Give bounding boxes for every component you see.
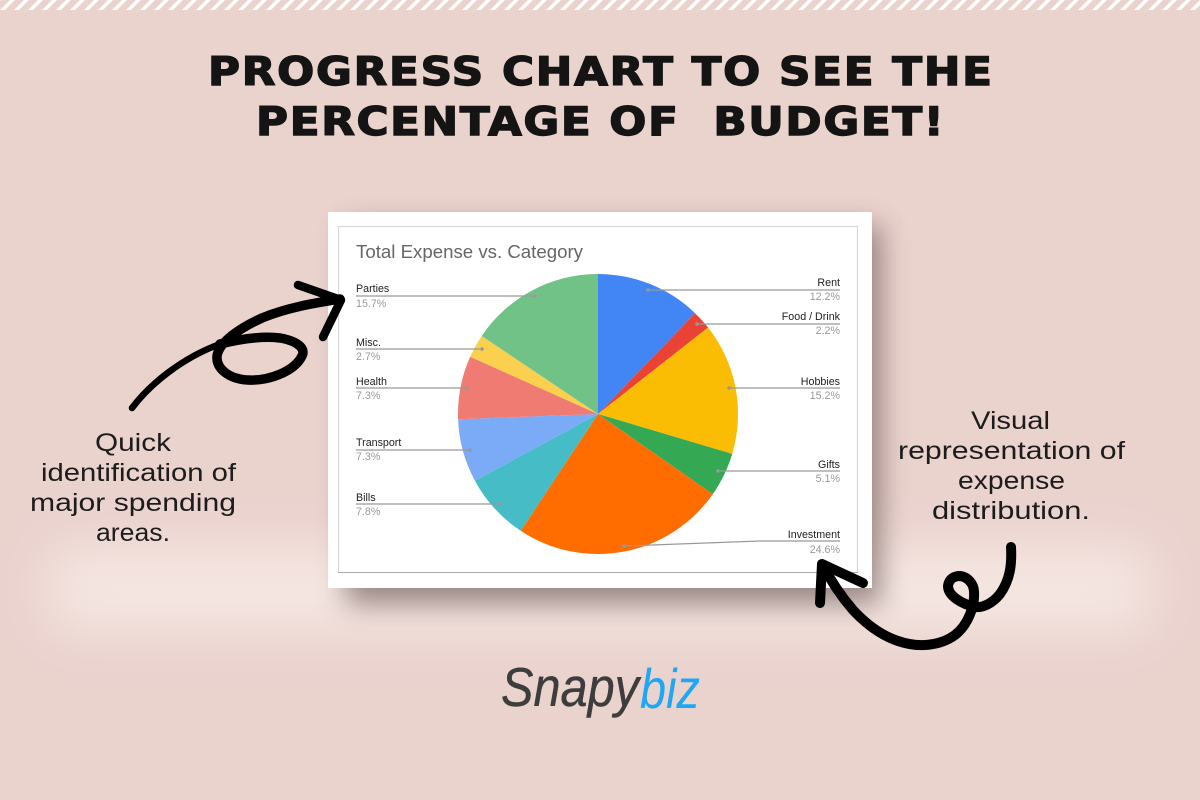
right pie labels: 15.2% [810, 390, 840, 402]
left pie labels: 15.7% [356, 298, 387, 310]
left pie labels: Parties [356, 283, 389, 295]
title [208, 49, 992, 144]
left pie labels: Misc. [356, 337, 381, 349]
text block: right callout [898, 407, 1125, 525]
right pie labels: Food / Drink [782, 311, 841, 323]
title: PROGRESS CHART TO SEE THE [208, 49, 992, 94]
chart title: Total Expense vs. Category [356, 242, 583, 262]
right pie labels: 12.2% [810, 291, 840, 303]
right pie labels: Investment [788, 529, 840, 541]
arrow: right [820, 547, 1011, 645]
text block: left callout: Quick [95, 429, 172, 457]
right pie labels: Rent [817, 277, 840, 289]
text block: right callout: expense [958, 467, 1065, 495]
arrow: left [132, 285, 341, 408]
left pie labels [356, 283, 401, 518]
text block: right callout: representation of [898, 437, 1125, 465]
left pie labels: 7.3% [356, 451, 381, 463]
left pie labels: Health [356, 376, 387, 388]
left pie labels: 7.8% [356, 506, 381, 518]
logo: biz [640, 657, 700, 720]
text block: right callout: Visual [971, 407, 1050, 435]
right pie labels: 2.2% [816, 325, 840, 337]
text block: left callout: areas. [96, 519, 170, 547]
logo: Snapy [501, 656, 642, 718]
leader lines [356, 290, 840, 546]
right pie labels: 24.6% [810, 544, 840, 556]
text block: left callout [30, 429, 236, 547]
pie chart [458, 274, 738, 554]
right pie labels [782, 277, 841, 556]
left pie labels: 2.7% [356, 351, 381, 363]
left pie labels: Transport [356, 437, 401, 449]
title: PERCENTAGE OF BUDGET! [256, 99, 944, 144]
left pie labels: 7.3% [356, 390, 381, 402]
right pie labels: Hobbies [801, 376, 840, 388]
left pie labels: Bills [356, 492, 376, 504]
panel: chart card [328, 212, 880, 604]
text block: left callout: major spending [30, 489, 236, 517]
right pie labels: Gifts [818, 459, 840, 471]
text block: right callout: distribution. [932, 497, 1090, 525]
text block: left callout: identification of [41, 459, 236, 487]
right pie labels: 5.1% [816, 473, 840, 485]
